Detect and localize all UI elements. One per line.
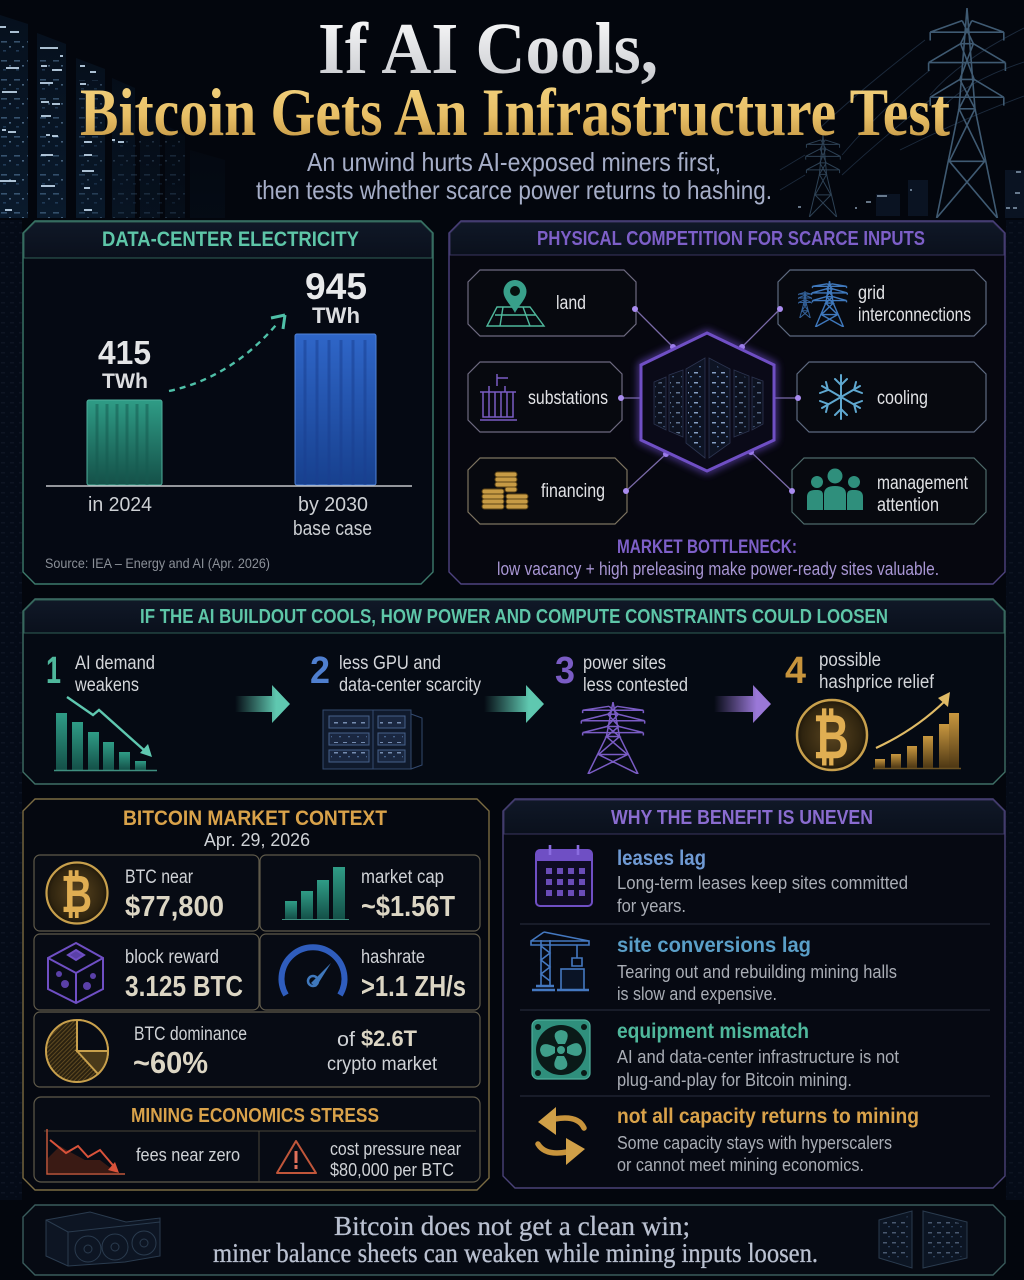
stat: hashrate: hashrate: [361, 947, 425, 968]
box: management attention: [792, 458, 986, 524]
item: site conversions lag: Tearing out and rebuilding mining halls: [617, 962, 897, 982]
stat: hashrate: [260, 934, 480, 1010]
icon: people: [807, 468, 863, 510]
bar: 2024: [87, 400, 162, 485]
icon: bitcoin coin: [46, 862, 108, 924]
stat: BTC dominance: BTC dominance: [134, 1024, 247, 1045]
sub-panel: mining economics stress: fees near zero: [136, 1145, 240, 1165]
arrow: 3 to 4: [714, 685, 771, 723]
step 4: possible: [819, 650, 881, 671]
stat: market cap: market cap: [361, 867, 444, 888]
step 3: [555, 650, 688, 774]
icon: bitcoin coin: ₿: [61, 866, 92, 924]
box: substations: [468, 362, 622, 432]
source: Source: IEA – Energy and AI (Apr. 2026): [45, 555, 270, 571]
stat: BTC dominance: $2.6T: [361, 1026, 418, 1051]
stat: BTC price: $77,800: [125, 891, 224, 923]
box: grid interconnections: [778, 270, 986, 336]
item: equipment mismatch: [532, 1020, 899, 1090]
step 1: weakens: [74, 675, 139, 696]
stat: block reward: 3.125 BTC: [125, 971, 243, 1003]
icon: calendar: [536, 845, 592, 906]
item: leases lag: [536, 845, 908, 916]
icon: map pin: [487, 280, 544, 326]
step 2: less GPU and: [339, 653, 441, 674]
item: equipment mismatch: AI and data-center infrastructure is not: [617, 1047, 899, 1067]
step 3: less contested: [583, 675, 688, 696]
panel: bitcoin market context: [23, 799, 489, 1190]
icon: pie chart: [46, 1020, 108, 1082]
icon: swap arrows: [538, 1107, 585, 1165]
value 415: [98, 334, 151, 393]
box: financing: financing: [541, 481, 605, 502]
market bottleneck note: low vacancy + high preleasing make power-ready sites valuable.: [497, 559, 939, 579]
axis labels: in 2024: [88, 494, 152, 516]
panel: data-center electricity: [23, 221, 433, 584]
heading: PHYSICAL COMPETITION FOR SCARCE INPUTS: [537, 228, 925, 250]
item: leases lag: Long-term leases keep sites committed: [617, 873, 908, 893]
step 1: 1: [46, 650, 61, 692]
icon: bars: [282, 867, 349, 920]
box: management attention: management: [877, 473, 969, 494]
icon: fan: [532, 1020, 590, 1079]
icon: central server hexagon: [641, 333, 774, 471]
step 2: 2: [310, 650, 330, 692]
sub-panel: mining economics stress: [34, 1097, 480, 1182]
title: If AI Cools,: [318, 8, 658, 89]
market bottleneck note: MARKET BOTTLENECK:: [617, 537, 797, 558]
box: grid interconnections: grid: [858, 283, 885, 304]
icon: gauge: [282, 947, 345, 995]
step 4: 4: [785, 650, 806, 692]
stat: block reward: block reward: [125, 947, 219, 968]
icon: snowflake: [820, 375, 862, 419]
sub-panel: mining economics stress: MINING ECONOMICS STRESS: [131, 1105, 379, 1127]
background: transmission towers right: [780, 8, 1024, 1200]
arrow: 2 to 3: [484, 685, 544, 723]
arrow: growth: [169, 315, 285, 391]
value 415: TWh: [102, 370, 148, 393]
box: land: [468, 270, 636, 336]
panel: if the AI buildout cools: [23, 599, 1005, 784]
heading: DATA-CENTER ELECTRICITY: [102, 228, 359, 251]
item: leases lag: for years.: [617, 896, 686, 916]
text: conclusion: [213, 1211, 818, 1268]
heading: BITCOIN MARKET CONTEXT: [123, 807, 387, 830]
stat: BTC dominance: [34, 1012, 480, 1087]
value 945: TWh: [312, 303, 360, 328]
icon: server racks: [323, 710, 422, 769]
item: leases lag: leases lag: [617, 847, 706, 870]
heading: WHY THE BENEFIT IS UNEVEN: [611, 807, 873, 829]
item: equipment mismatch: plug-and-play for Bitcoin mining.: [617, 1070, 852, 1090]
axis labels: base case: [293, 518, 372, 540]
stat: BTC dominance: of: [337, 1029, 355, 1051]
step 4: [785, 650, 961, 772]
stat: BTC dominance: ~60%: [133, 1045, 208, 1080]
icon: bitcoin coin: ₿: [813, 703, 849, 772]
heading: [123, 807, 387, 850]
panel: physical competition: [449, 221, 1005, 584]
box: cooling: [797, 362, 986, 432]
box: grid interconnections: interconnections: [858, 305, 971, 326]
subtitle: [256, 147, 772, 205]
axis labels: [88, 494, 372, 540]
heading: Apr. 29, 2026: [204, 830, 310, 850]
step 2: [310, 650, 481, 769]
icon: warning triangle: [277, 1141, 316, 1173]
background: server racks left: [0, 15, 225, 1200]
icon: dice: [48, 943, 103, 1003]
icon: pylons: [798, 281, 847, 327]
item: site conversions lag: is slow and expensive.: [617, 984, 777, 1004]
market bottleneck note: [497, 537, 939, 579]
step 3: 3: [555, 650, 575, 692]
title: [80, 8, 950, 150]
box: land: land: [556, 293, 586, 314]
value 945: 945: [305, 266, 367, 307]
box: financing: [468, 458, 627, 524]
item: equipment mismatch: equipment mismatch: [617, 1020, 809, 1043]
box: substations: substations: [528, 388, 608, 409]
subtitle: An unwind hurts AI-exposed miners first,: [307, 147, 721, 177]
step 1: [46, 650, 157, 770]
item: site conversions lag: [531, 932, 897, 1004]
icon: coins: [482, 472, 528, 509]
bar: 2030: [295, 334, 376, 485]
stat: block reward: [34, 934, 259, 1010]
text: conclusion: miner balance sheets can weaken while mining inputs loosen.: [213, 1238, 818, 1268]
step 3: power sites: [583, 653, 666, 674]
icon: falling bars: [54, 697, 157, 770]
subtitle: then tests whether scarce power returns to hashing.: [256, 175, 772, 205]
step 4: hashprice relief: [819, 672, 935, 693]
arrow: 1 to 2: [235, 685, 290, 723]
stat: BTC price: BTC near: [125, 867, 194, 888]
stat: market cap: ~$1.56T: [361, 891, 455, 923]
sub-panel: mining economics stress: $80,000 per BTC: [330, 1160, 454, 1180]
icon: rising bars: [873, 692, 961, 768]
axis labels: by 2030: [298, 494, 368, 516]
icon: server rack: [879, 1211, 967, 1268]
stat: BTC dominance: crypto market: [327, 1054, 438, 1075]
step 1: AI demand: [75, 653, 155, 674]
stat: BTC price: [34, 855, 259, 931]
item: not all capacity returns: not all capacity returns to mining: [617, 1105, 919, 1128]
icon: mining rigs: [46, 1212, 160, 1266]
step 2: data-center scarcity: [339, 675, 481, 696]
icon: substation: [480, 374, 517, 420]
value 415: 415: [98, 334, 151, 371]
icon: bitcoin coin: [797, 700, 867, 772]
icon: crane: [531, 932, 589, 990]
item: site conversions lag: site conversions lag: [617, 934, 811, 957]
item: not all capacity returns: [538, 1105, 919, 1175]
text: conclusion: Bitcoin does not get a clean win;: [334, 1211, 690, 1241]
value 945: [305, 266, 367, 328]
box: cooling: cooling: [877, 388, 928, 409]
panel: why the benefit is uneven: [503, 799, 1005, 1188]
icon: purple tower: [581, 702, 645, 774]
stat: market cap: [260, 855, 480, 931]
sub-panel: mining economics stress: cost pressure near: [330, 1139, 461, 1159]
panel: conclusion footer: [23, 1205, 1005, 1275]
stat: hashrate: >1.1 ZH/s: [361, 971, 466, 1003]
item: not all capacity returns: Some capacity stays with hyperscalers: [617, 1133, 892, 1153]
heading: IF THE AI BUILDOUT COOLS, HOW POWER AND COMPUTE CONSTRAINTS COULD LOOSEN: [140, 606, 888, 628]
connectors: [618, 306, 801, 494]
box: management attention: attention: [877, 495, 939, 516]
icon: falling fees chart: [47, 1129, 125, 1174]
item: not all capacity returns: or cannot meet mining economics.: [617, 1155, 864, 1175]
